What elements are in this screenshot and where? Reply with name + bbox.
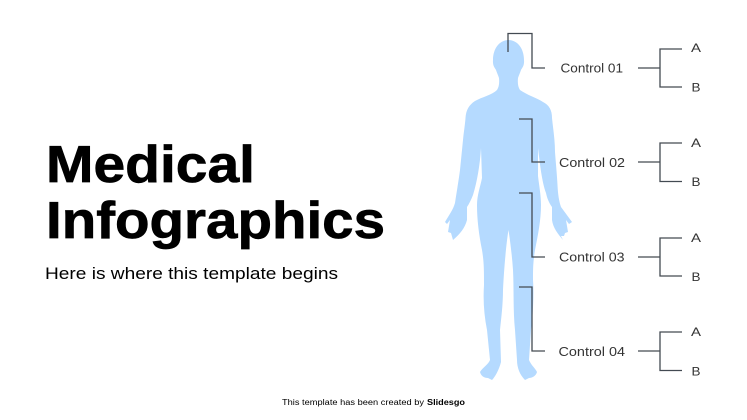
label: Control 03 group: B [692, 270, 700, 284]
label: Control 02 group: B [692, 175, 700, 189]
label: Control 02 group [559, 136, 701, 189]
connector: body to Control 03 [519, 193, 545, 257]
label: Control 03 group: Control 03 [559, 250, 624, 264]
icon: human body silhouette [445, 40, 572, 380]
title: Medical [46, 136, 255, 194]
label: Control 01 group [560, 41, 701, 94]
connector: body to Control 04 [519, 287, 545, 351]
label: Control 02 group: Control 02 [559, 155, 625, 170]
label: Control 04 group: Control 04 [558, 344, 625, 359]
label: Control 04 group [558, 325, 701, 378]
title: Infographics [46, 192, 385, 250]
footer credit [282, 398, 465, 407]
footer credit: Slidesgo [427, 398, 465, 407]
label: Control 03 group [559, 231, 701, 284]
connector: body to Control 01 [508, 34, 545, 68]
label: Control 04 group: A [691, 325, 701, 339]
label: Control 04 group: B [692, 364, 700, 378]
label: Control 01 group: B [692, 80, 700, 94]
label: Control 03 group: A [691, 231, 701, 245]
subtitle: Here is where this template begins [45, 264, 338, 283]
title [46, 136, 385, 250]
connector: body to Control 02 [519, 119, 545, 162]
label: Control 01 group: Control 01 [560, 60, 623, 76]
footer credit: This template has been created by [282, 398, 424, 407]
label: Control 02 group: A [691, 136, 701, 150]
label: Control 01 group: A [691, 41, 701, 55]
